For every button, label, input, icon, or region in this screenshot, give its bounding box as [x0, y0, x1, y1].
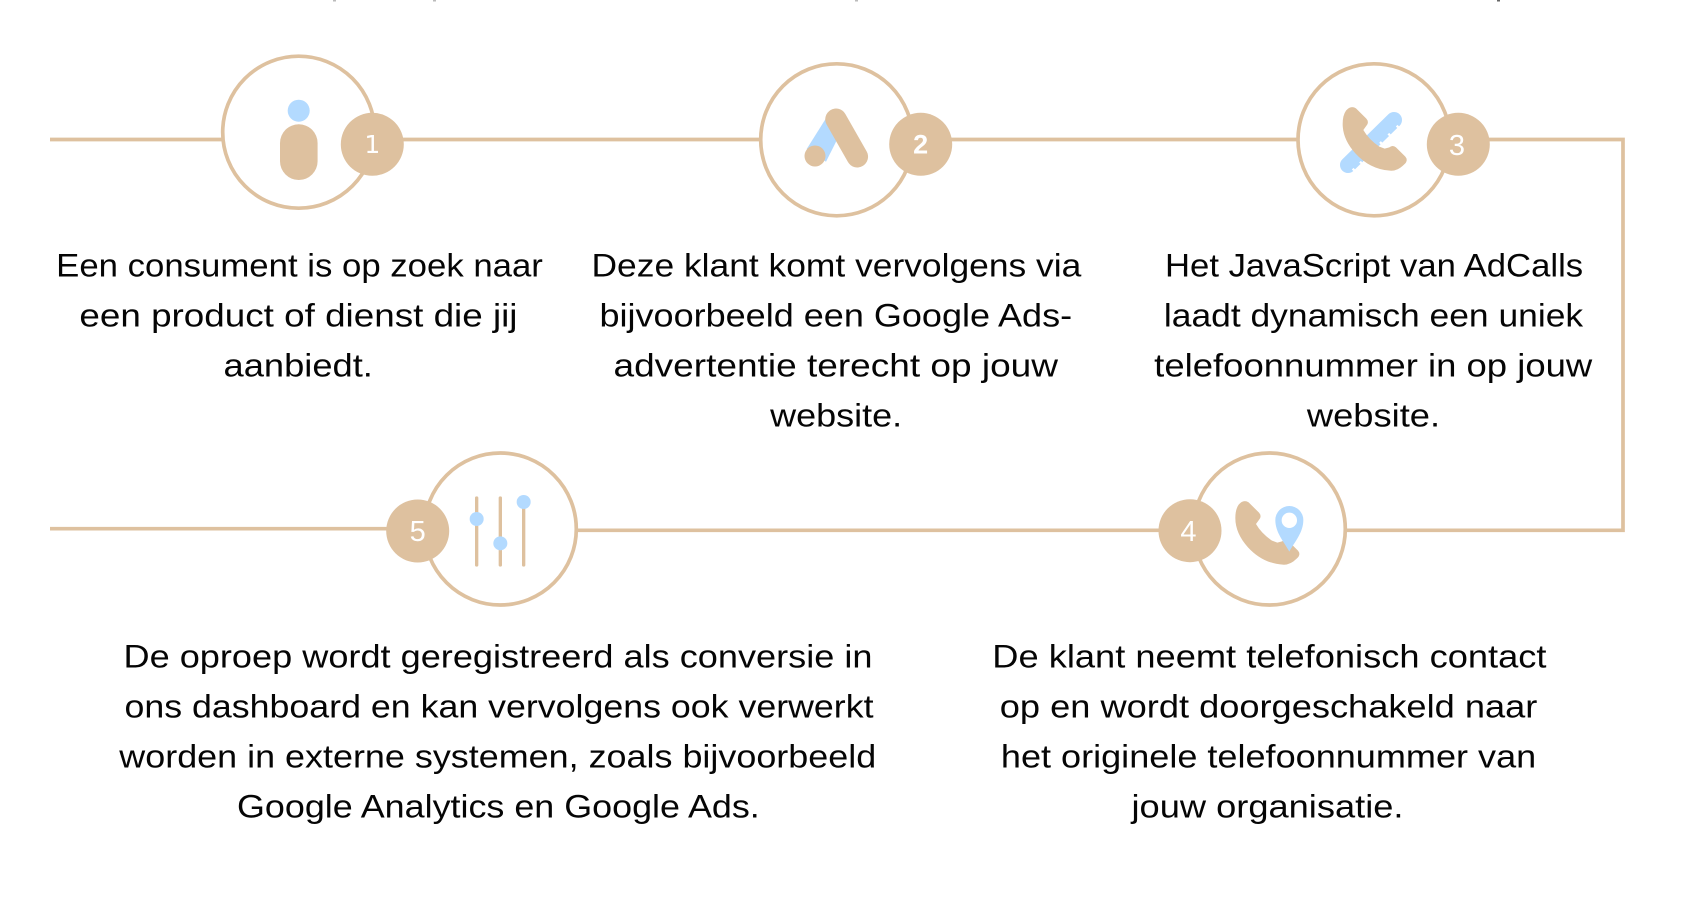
icon circle 3	[1298, 64, 1450, 216]
badge 1: 1	[364, 130, 380, 159]
icon: phone with ruler	[1343, 107, 1407, 172]
text: step 5 description	[118, 638, 876, 824]
text: step 3 description: Het JavaScript van AdCalls	[1165, 248, 1583, 284]
icon: Google Ads logo	[804, 118, 857, 166]
badge 2	[889, 113, 952, 176]
icon: info	[280, 100, 318, 180]
icon: phone with location pin	[1235, 501, 1303, 565]
text: step 2 description: website.	[769, 398, 902, 434]
text: step 5 description: Google Analytics en Google Ads.	[237, 788, 760, 824]
text: step 4 description: het originele telefoonnummer van	[1001, 738, 1536, 774]
badge 3	[1427, 113, 1490, 176]
icon circle 2	[761, 64, 913, 216]
text: step 4 description: op en wordt doorgeschakeld naar	[1000, 688, 1537, 724]
icon: sliders	[470, 495, 531, 565]
text: step 2 description: advertentie terecht op jouw	[614, 348, 1059, 384]
text: step 2 description: bijvoorbeeld een Google Ads-	[600, 298, 1072, 334]
panel: step 1	[56, 56, 543, 383]
text: step 5 description: worden in externe systemen, zoals bijvoorbeeld	[118, 738, 876, 774]
text: step 4 description	[992, 638, 1546, 824]
text: step 4 description: jouw organisatie.	[1130, 788, 1404, 824]
badge 1	[341, 113, 404, 176]
text: step 3 description: laadt dynamisch een uniek	[1164, 298, 1584, 334]
icon circle 4	[1193, 453, 1345, 605]
text: step 5 description: ons dashboard en kan vervolgens ook verwerkt	[124, 688, 874, 724]
panel: step 3	[1154, 64, 1593, 434]
badge 5	[386, 500, 449, 562]
text: step 1 description: Een consument is op zoek naar	[56, 248, 543, 284]
text: step 1 description: een product of dienst die jij	[79, 298, 518, 334]
text: step 3 description	[1154, 248, 1593, 434]
badge 5: 5	[410, 516, 426, 548]
text: step 2 description	[592, 248, 1082, 434]
panel: step 4	[992, 453, 1546, 824]
text: step 5 description: De oproep wordt geregistreerd als conversie in	[124, 638, 872, 674]
badge 3: 3	[1449, 130, 1465, 162]
text: step 4 description: De klant neemt telefonisch contact	[992, 638, 1546, 674]
badge 2: 2	[913, 130, 928, 160]
text: step 2 description: Deze klant komt vervolgens via	[592, 248, 1082, 284]
badge 4: 4	[1180, 516, 1197, 548]
text: step 3 description: website.	[1306, 398, 1440, 434]
icon circle 5	[424, 453, 576, 605]
panel: step 5	[118, 453, 876, 824]
text: step 1 description	[56, 248, 543, 384]
text: step 3 description: telefoonnummer in op jouw	[1154, 348, 1593, 384]
connector line: flow from step 1 through step 5	[50, 140, 1623, 530]
panel: step 2	[592, 64, 1082, 434]
badge 4	[1158, 499, 1222, 562]
icon circle 1	[223, 56, 375, 208]
text: step 1 description: aanbiedt.	[224, 348, 373, 384]
